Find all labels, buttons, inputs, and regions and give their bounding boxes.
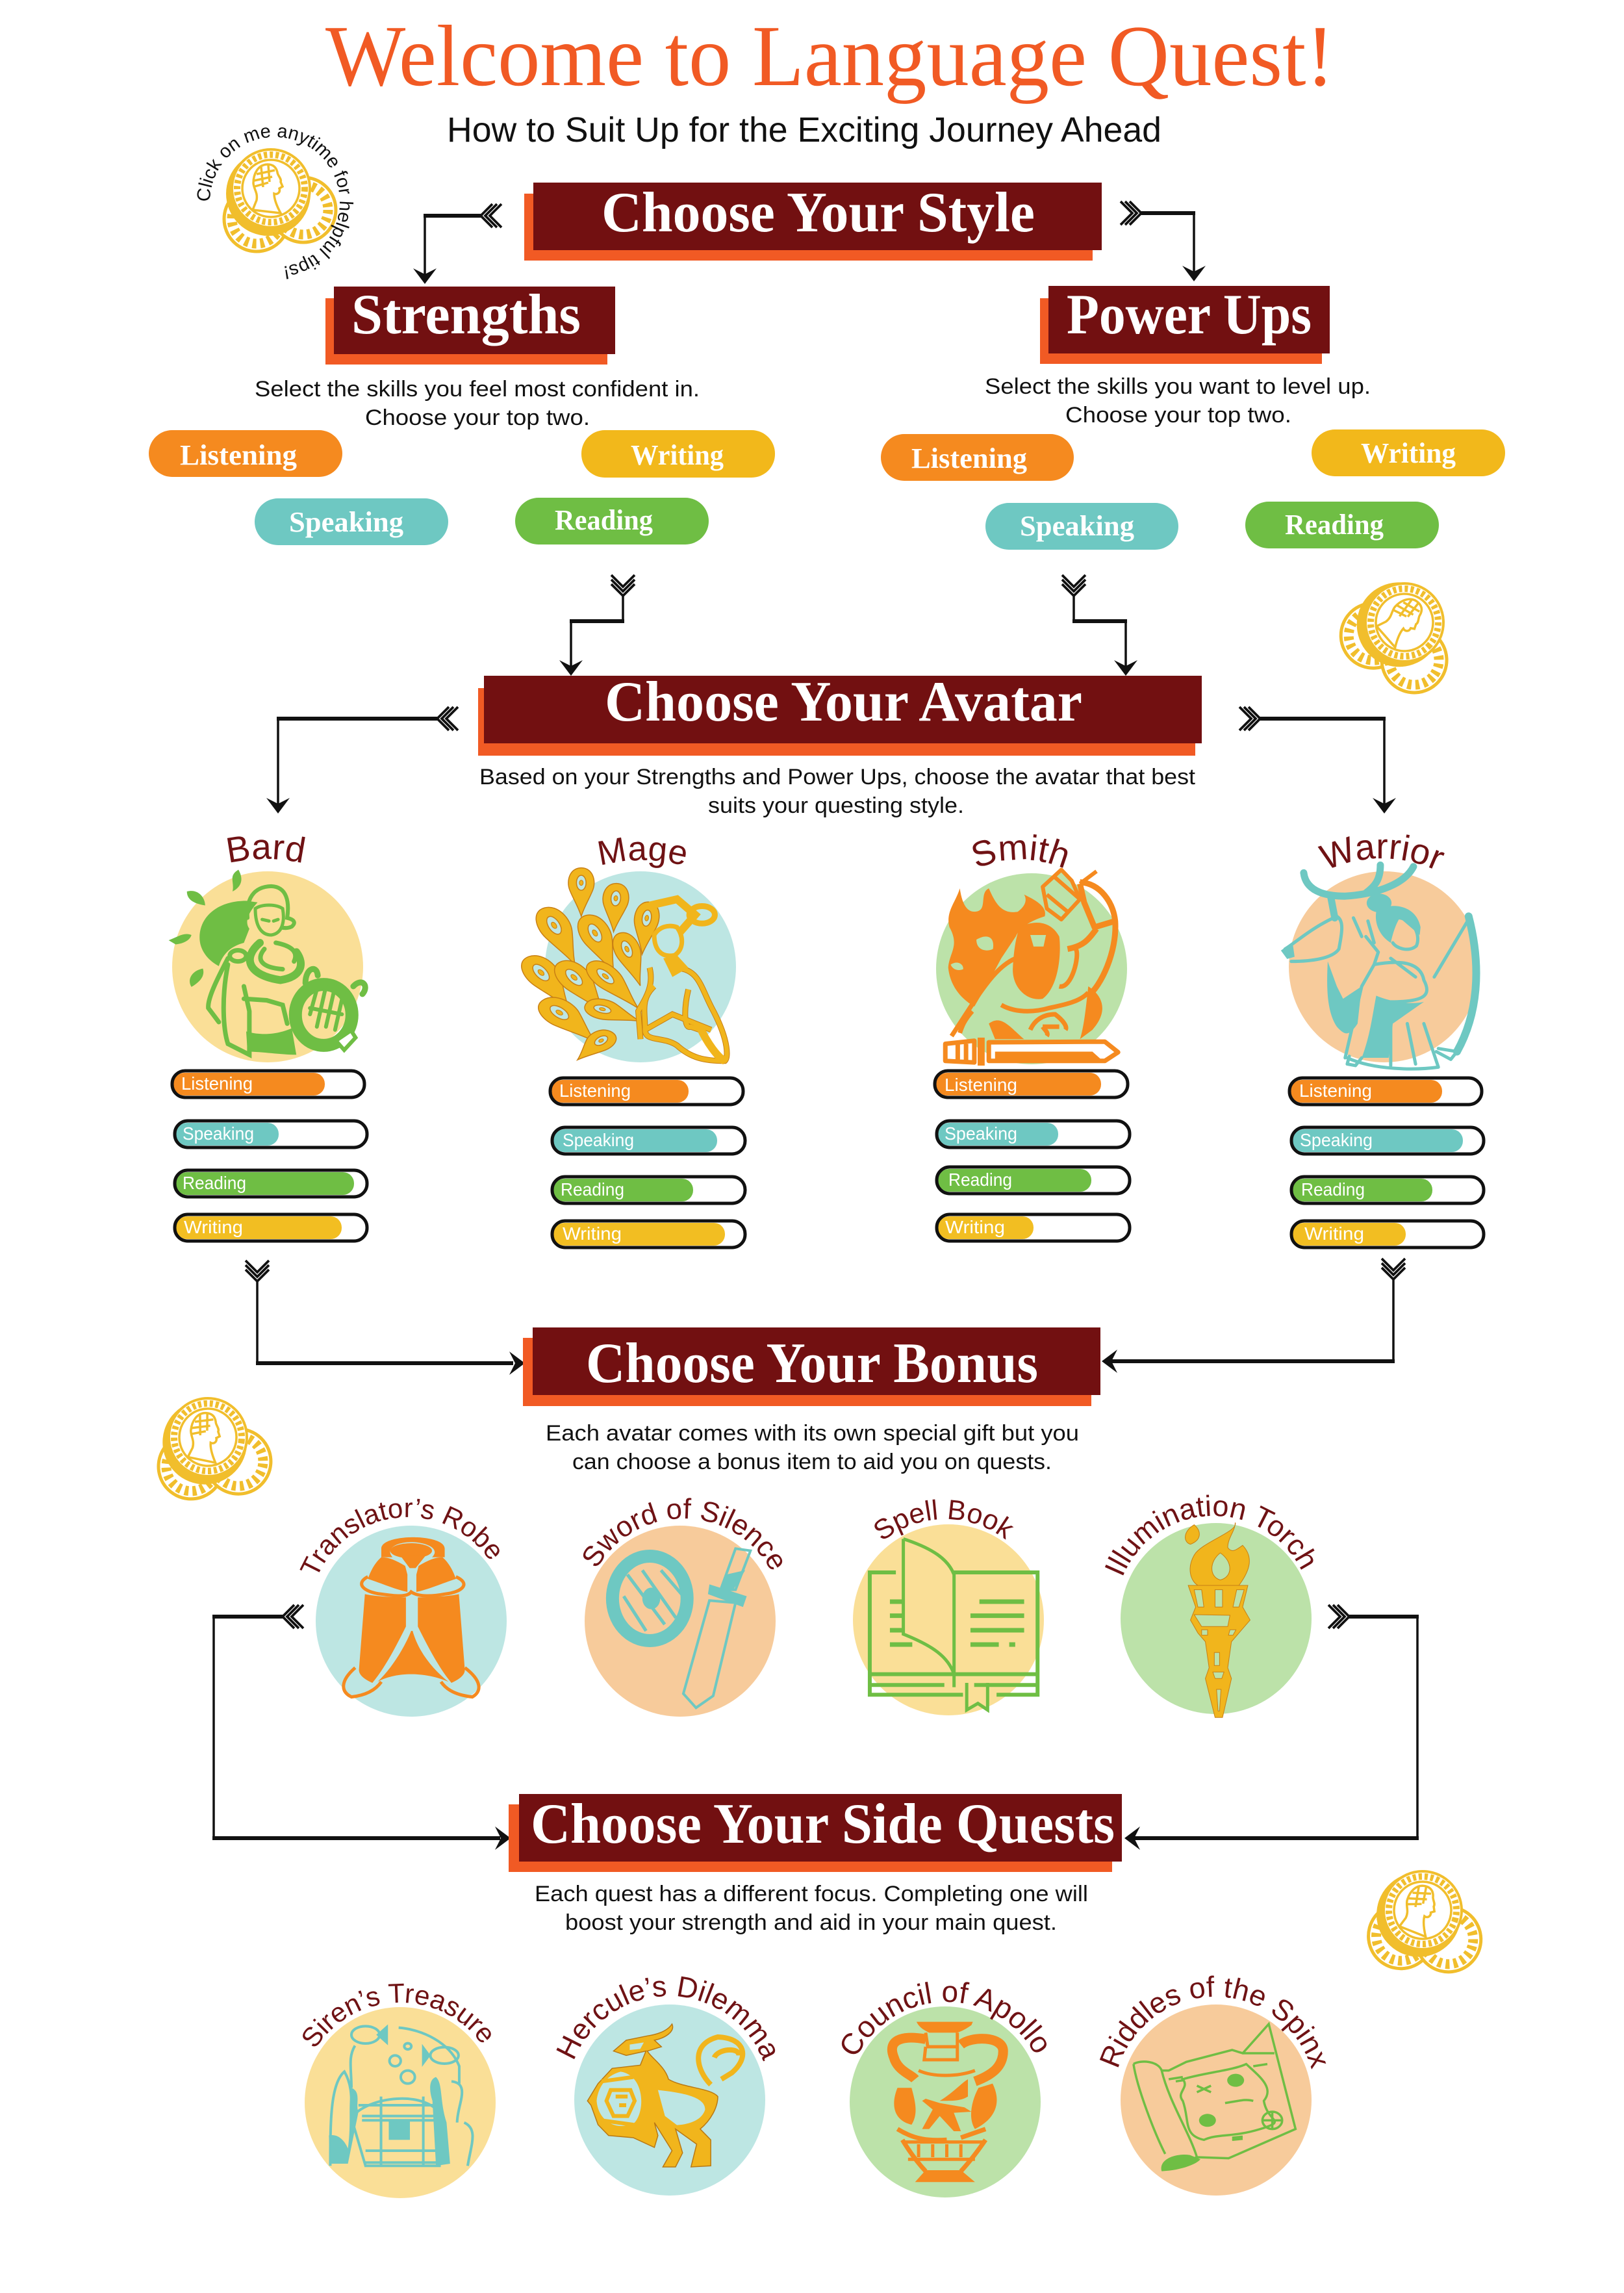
icon: bard: [169, 870, 365, 1062]
bar: Writing: Writing: [563, 1223, 622, 1244]
label: Smith: Smith: [972, 834, 1068, 868]
pill: Speaking: [985, 503, 1178, 550]
bar: Reading: [1291, 1177, 1484, 1203]
arrow: robe to side quests: [212, 1605, 511, 1850]
text: side quest instructions: Each quest has a different focus. Completing one will: [535, 1882, 1088, 1906]
text: strengths instructions: Choose your top two.: [365, 405, 590, 430]
icon: coins right: [1361, 1860, 1495, 1988]
heading: Choose Your Bonus: [523, 1327, 1100, 1406]
text: avatar instructions: Based on your Strengths and Power Ups, choose the avatar that best: [479, 765, 1196, 789]
heading: Choose Your Avatar: Choose Your Avatar: [605, 671, 1082, 734]
bar: Speaking: [175, 1121, 367, 1147]
bar: Speaking: Speaking: [1300, 1130, 1373, 1150]
pill: Reading: [515, 498, 709, 544]
bar: Listening: [1289, 1078, 1482, 1105]
text: avatar instructions: [479, 765, 1196, 818]
arrow: style to strengths: [413, 204, 501, 284]
heading: Choose Your Style: [524, 181, 1102, 261]
heading: Choose Your Style: Choose Your Style: [602, 181, 1035, 244]
quest: Riddles of the Spinx: [1099, 1975, 1326, 2196]
bar: Reading: Reading: [948, 1170, 1012, 1190]
pill: Reading: Reading: [1285, 509, 1384, 541]
arrow: avatar to bard: [266, 707, 458, 813]
icon: torch: [1186, 1522, 1250, 1717]
bar: Reading: Reading: [183, 1173, 246, 1193]
bar: Reading: Reading: [561, 1179, 624, 1199]
quest: Hercule's Dilemma: [556, 1977, 776, 2196]
label: Mage: Mage: [598, 837, 686, 868]
text: avatar instructions: suits your questing style.: [708, 793, 964, 818]
item: Spell Book: [853, 1500, 1044, 1715]
heading: Strengths: [325, 283, 615, 365]
pill: Writing: [1312, 429, 1505, 476]
bar: Speaking: [552, 1127, 745, 1154]
panel: Bard: [169, 836, 369, 1242]
panel: Mage: [521, 837, 747, 1249]
item: Illumination Torch: Illumination Torch: [1105, 1494, 1315, 1575]
text: power ups instructions: Choose your top two.: [1065, 403, 1291, 428]
pill: Writing: Writing: [631, 439, 724, 471]
arrow: avatar to warrior: [1239, 707, 1396, 813]
bar: Speaking: [937, 1121, 1130, 1147]
icon: coins top right: [1328, 562, 1478, 713]
panel: Warrior: [1281, 834, 1485, 1249]
pill: Reading: [1245, 502, 1439, 548]
pill: Reading: Reading: [555, 504, 653, 536]
icon: sword and shield: [613, 1548, 750, 1708]
bar: Writing: Writing: [945, 1217, 1005, 1237]
pill: Listening: Listening: [180, 439, 297, 471]
heading: Choose Your Bonus: Choose Your Bonus: [586, 1332, 1038, 1395]
item: Translator's Robe: [299, 1498, 507, 1717]
icon: amphora: [892, 2022, 1003, 2182]
label: Bard: Bard: [227, 836, 305, 863]
icon: book: [870, 1539, 1037, 1710]
icon: robe: [344, 1537, 479, 1697]
bar: Writing: Writing: [1304, 1223, 1364, 1244]
bar: Reading: [552, 1177, 745, 1203]
pill: Writing: [581, 430, 775, 478]
icon: mage: [514, 868, 736, 1066]
pill: Listening: [881, 434, 1074, 481]
bar: Listening: [935, 1071, 1128, 1097]
text: side quest instructions: [535, 1882, 1088, 1935]
text: strengths instructions: Select the skills you feel most confident in.: [255, 377, 700, 402]
bar: Listening: Listening: [559, 1081, 631, 1101]
icon: treasure chest: [329, 2026, 473, 2166]
quest: Council of Apollo: [842, 1982, 1047, 2197]
arrow: warrior to bonus: [1102, 1259, 1405, 1373]
bar: Listening: Listening: [945, 1075, 1017, 1095]
label: Warrior: Warrior: [1317, 834, 1445, 869]
pill: Speaking: Speaking: [289, 506, 403, 538]
arrow: strengths to avatar: [559, 575, 635, 676]
heading: Choose Your Avatar: [478, 671, 1202, 756]
quest: Council of Apollo: Council of Apollo: [842, 1982, 1047, 2055]
pill: Speaking: [255, 498, 448, 545]
pill: Listening: [149, 430, 342, 477]
quest: Siren's Treasure: [303, 1983, 496, 2198]
title: Welcome to Language Quest!: [325, 8, 1334, 104]
arrow: torch to side quests: [1124, 1605, 1419, 1850]
item: Translator's Robe: Translator’s Robe: [299, 1498, 500, 1572]
panel: power ups: [881, 283, 1505, 550]
pill: Writing: Writing: [1361, 437, 1456, 469]
bar: Reading: [175, 1170, 367, 1197]
item: Spell Book: Spell Book: [874, 1500, 1013, 1540]
bar: Writing: [1291, 1221, 1484, 1248]
heading: Strengths: Strengths: [351, 283, 581, 346]
quest: Riddles of the Spinx: Riddles of the Spinx: [1099, 1975, 1326, 2069]
panel: strengths: [149, 283, 775, 545]
heading: Power Ups: Power Ups: [1067, 283, 1312, 346]
bar: Reading: [937, 1167, 1130, 1194]
quest: Siren's Treasure: Siren’s Treasure: [303, 1983, 491, 2047]
pill: Speaking: Speaking: [1020, 510, 1134, 542]
arrow: style to power ups: [1121, 201, 1206, 281]
bar: Speaking: Speaking: [945, 1123, 1017, 1144]
icon: warrior: [1281, 865, 1480, 1069]
text: strengths instructions: [255, 377, 700, 430]
arrow: power ups to avatar: [1062, 575, 1137, 676]
text: power ups instructions: [985, 374, 1371, 428]
bar: Listening: Listening: [1299, 1081, 1372, 1101]
bar: Speaking: Speaking: [183, 1123, 254, 1144]
item: Sword of Silence: Sword of Silence: [583, 1498, 782, 1570]
heading: Choose Your Side Quests: Choose Your Side Quests: [531, 1793, 1115, 1856]
item: Sword of Silence: [583, 1498, 782, 1717]
icon: smith: [936, 870, 1127, 1066]
bar: Reading: Reading: [1301, 1179, 1365, 1199]
text: side quest instructions: boost your strength and aid in your main quest.: [565, 1910, 1057, 1935]
quest: Hercule's Dilemma: Hercule’s Dilemma: [556, 1977, 776, 2061]
bar: Listening: Listening: [181, 1073, 253, 1094]
bar: Writing: [937, 1214, 1130, 1241]
bar: Speaking: [1291, 1127, 1484, 1154]
arrow: bard to bonus: [246, 1261, 525, 1375]
panel: Smith: [933, 834, 1132, 1242]
icon: lion: [587, 2024, 742, 2167]
icon: tips coin with circular caption: Click on me anytime for helpful tips!: [197, 127, 353, 279]
bar: Listening: [550, 1078, 743, 1105]
item: Illumination Torch: [1105, 1494, 1315, 1718]
subtitle: How to Suit Up for the Exciting Journey Ahead: [447, 110, 1161, 149]
icon: coins left: [156, 1394, 276, 1505]
bar: Listening: [172, 1071, 364, 1097]
text: bonus instructions: [546, 1421, 1079, 1474]
icon: map: [1134, 2024, 1295, 2171]
bar: Writing: [552, 1221, 745, 1248]
text: bonus instructions: Each avatar comes with its own special gift but you: [546, 1421, 1079, 1446]
bar: Writing: Writing: [184, 1217, 243, 1237]
pill: Listening: Listening: [911, 442, 1027, 474]
bar: Writing: [175, 1214, 367, 1241]
text: bonus instructions: can choose a bonus item to aid you on quests.: [572, 1450, 1052, 1474]
text: power ups instructions: Select the skills you want to level up.: [985, 374, 1371, 399]
bar: Speaking: Speaking: [563, 1130, 634, 1150]
